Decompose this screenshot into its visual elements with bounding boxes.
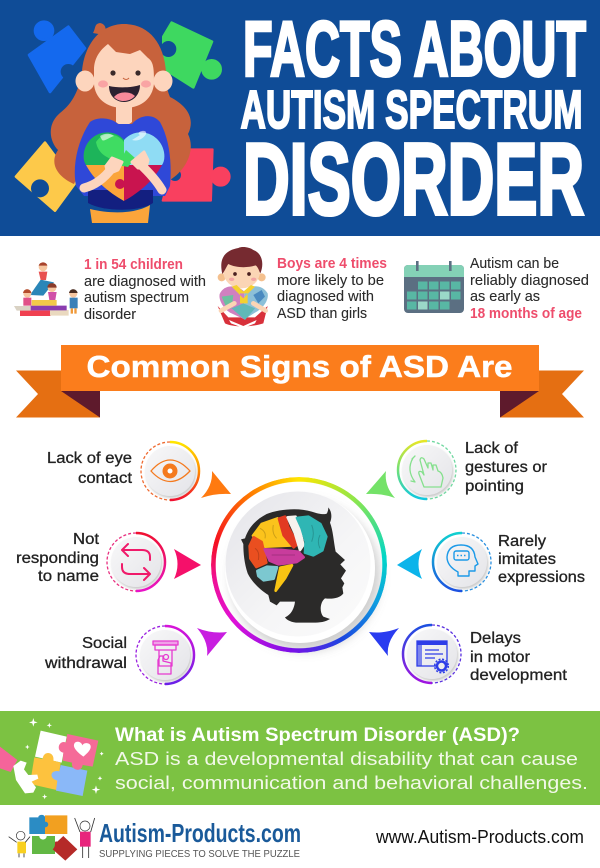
sign: not responding to name: to name [38,568,99,585]
sign: delays in motor development: Delays [470,630,521,647]
title [240,4,586,236]
sign: delays in motor development: in motor [470,649,530,666]
sign: not responding to name: Not [73,531,100,548]
icon: children on books [14,262,78,316]
icon: green puzzle piece [160,23,221,87]
sign: delays in motor development [403,625,568,684]
stat: 18 months: 18 months of age [470,305,582,322]
icon: repeat arrows [122,544,150,580]
icon: eye [151,460,190,482]
icon: head with speech [447,545,478,576]
banner: common signs [16,345,584,418]
panel: what is ASD: What is Autism Spectrum Disorder (ASD)? [115,725,520,746]
sign: lack of eye contact: Lack of eye [47,450,132,467]
sign: rarely imitates expressions: Rarely [498,533,546,550]
sign: rarely imitates expressions: expressions [498,569,585,586]
illustration: child head with brain [241,507,346,623]
icon: logo puzzle and children [9,815,95,861]
sign: lack of gestures: gestures or [465,459,547,476]
stat: 18 months: Autism can be [470,255,559,272]
stat: boys 4 times: Boys are 4 times [277,255,387,272]
sign: not responding to name [16,531,165,591]
arrow: orange [201,471,231,498]
header panel [0,0,600,236]
arrow: purple [197,628,227,656]
stat: boys 4 times [218,247,387,328]
panel: what is ASD [0,711,600,805]
stat: 18 months: as early as [470,288,540,305]
puzzle heart [84,131,164,201]
website url: www.Autism-Products.com [375,826,584,847]
center rainbow ring [210,476,386,652]
center brain disc [225,492,375,643]
banner: common signs: Common Signs of ASD Are [86,349,512,384]
girl face details [98,70,151,102]
illustration: hands assembling puzzle [0,718,104,799]
sign: not responding to name: responding [16,550,99,567]
arrow: blue [369,628,399,656]
stat: boys 4 times: more likely to be [277,272,384,289]
arrow: pink [174,549,201,579]
icon: calendar [404,261,464,313]
icon: red puzzle piece [163,149,230,201]
sign: lack of eye contact: contact [78,470,133,487]
stat: 18 months [404,255,589,322]
icon: hand at slot [153,641,178,674]
icon: yellow puzzle piece [16,143,75,211]
footer logo: Autism-Products.com [99,818,301,848]
stat: 1 in 54 children [14,256,206,323]
sign: social withdrawal: Social [82,635,127,652]
icon: boy with puzzle heart [218,247,268,328]
sign: lack of gestures: Lack of [465,440,519,457]
stat: 18 months: reliably diagnosed [470,272,589,289]
icon: browser with gear [417,641,448,673]
sign: social withdrawal: withdrawal [44,655,127,672]
footer logo: SUPPLYING PIECES TO SOLVE THE PUZZLE [99,849,300,860]
stat: boys 4 times: diagnosed with [277,288,374,305]
sign: lack of eye contact [47,442,199,500]
stat: 1 in 54 children: 1 in 54 children [84,256,183,273]
stat: 1 in 54 children: autism spectrum [84,289,189,306]
arrow: cyan [397,549,422,579]
stat: 1 in 54 children: disorder [84,306,136,323]
panel: what is ASD: social, communication and behavioral challenges. [115,772,588,793]
arrow: green [366,471,395,498]
illustration: girl holding puzzle heart [51,23,191,223]
sign: lack of gestures [398,440,547,499]
sign: social withdrawal [44,626,194,684]
stat: 1 in 54 children: are diagnosed with [84,273,206,290]
sign: rarely imitates expressions: imitates [498,551,556,568]
sign: delays in motor development: development [470,667,568,684]
sign: rarely imitates expressions [433,533,585,591]
icon: blue puzzle piece [29,22,85,92]
sign: lack of gestures: pointing [465,478,524,495]
footer logo [9,815,301,861]
icon: pointing hand [410,456,443,487]
panel: what is ASD: ASD is a developmental disability that can cause [115,748,578,769]
stat: boys 4 times: ASD than girls [277,305,367,322]
